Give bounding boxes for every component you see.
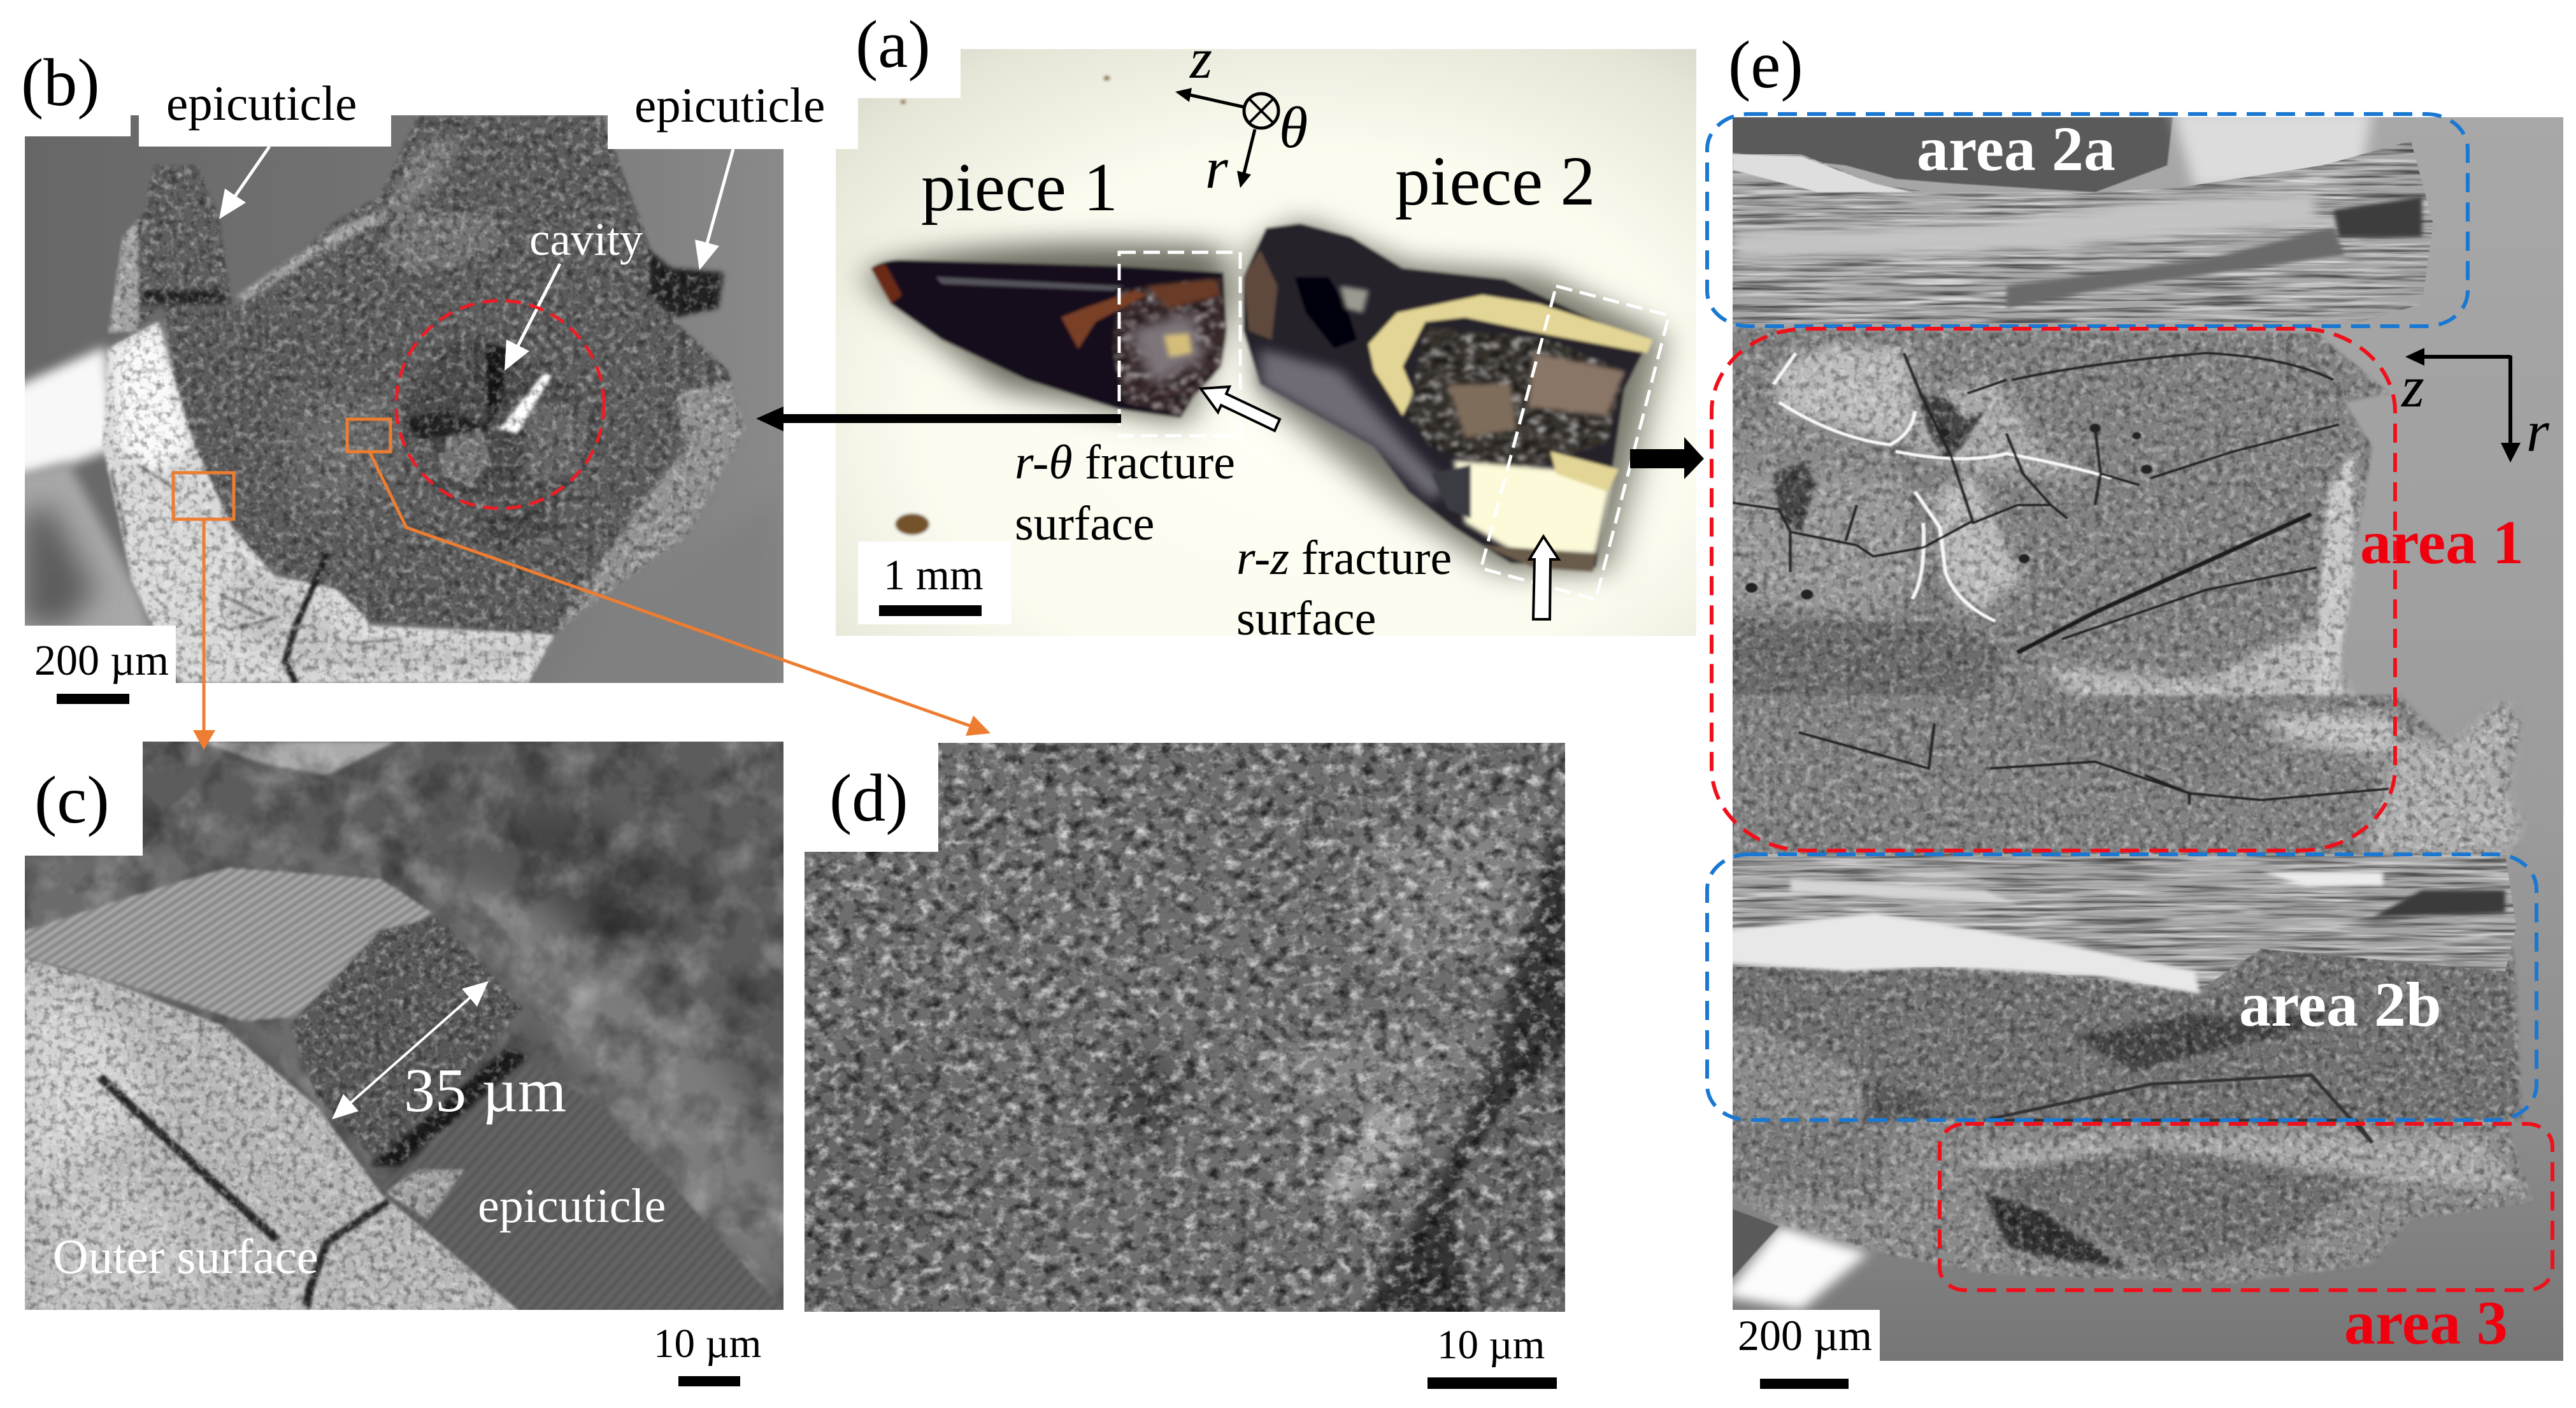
arrow: epicuticle left <box>219 147 269 219</box>
blue dashed area 2b <box>1707 854 2537 1120</box>
label r-z fracture surface: fracture <box>1289 531 1452 585</box>
label area 2a: area 2a <box>1917 113 2115 184</box>
label area 2b: area 2b <box>2239 969 2442 1040</box>
scale bar <box>57 694 129 704</box>
label (c): (c) <box>34 763 110 837</box>
outlined arrow to r-theta surface <box>1201 387 1280 431</box>
axes z and r <box>2400 348 2550 464</box>
scale bar <box>1428 1377 1557 1389</box>
label r-z fracture surface: r-z <box>1236 531 1289 585</box>
label (a): (a) <box>855 7 931 82</box>
label (e): (e) <box>1728 27 1803 102</box>
scale box 1 mm <box>858 542 1012 624</box>
label epicuticle right: epicuticle <box>634 78 825 133</box>
label area 3: area 3 <box>2344 1289 2508 1358</box>
label epicuticle left: epicuticle <box>166 76 357 131</box>
white dashed box on piece 1 <box>1119 252 1240 436</box>
blue dashed area 2a <box>1707 114 2468 326</box>
scale box 1 mm: 1 mm <box>884 550 984 599</box>
white label notches <box>836 49 961 149</box>
label 35 um: 35 µm <box>404 1056 566 1125</box>
axes z and r: z <box>2400 354 2424 419</box>
arrow: cavity <box>504 264 560 371</box>
orange connector to panel c <box>193 519 215 750</box>
axes: z, r, theta: θ <box>1279 95 1308 160</box>
label (b): (b) <box>21 45 100 120</box>
micrograph b <box>25 115 784 683</box>
connector: block arrow from a to e <box>1630 437 1704 479</box>
label r-theta fracture surface: fracture <box>1073 436 1235 489</box>
outlined arrow to r-z surface <box>1529 536 1559 619</box>
axes: z, r, theta: r <box>1205 136 1229 201</box>
axes: z, r, theta <box>1175 27 1308 201</box>
panel d: rough surface SEM <box>790 728 1614 1389</box>
red dashed area 3 <box>1940 1124 2552 1290</box>
label r-theta fracture surface: surface <box>1015 497 1154 550</box>
micrograph c <box>0 728 824 1332</box>
label r-z fracture surface: surface <box>1236 592 1376 645</box>
scale bar <box>1760 1379 1849 1389</box>
label area 1: area 1 <box>2360 508 2524 577</box>
white dashed box on piece 2 <box>1481 286 1669 600</box>
panel e: r-z fracture SEM <box>1707 27 2576 1389</box>
white label notches <box>0 0 828 683</box>
micrograph d <box>790 728 1614 1332</box>
label r-theta fracture surface: r-θ <box>1015 436 1073 489</box>
scale label 10 um: 10 µm <box>1437 1322 1545 1368</box>
scale label 200 um: 200 µm <box>1738 1311 1872 1360</box>
scale bar <box>678 1376 740 1386</box>
red dashed area 1 <box>1712 329 2395 851</box>
axes: z, r, theta: z <box>1189 27 1212 90</box>
panel a: photograph of two pieces <box>822 7 1710 648</box>
panel b: fracture surface SEM <box>24 58 824 704</box>
label outer surface: Outer surface <box>53 1229 318 1284</box>
arrow: epicuticle right <box>695 149 733 270</box>
axes z and r: r <box>2526 399 2550 464</box>
scale label 200 um: 200 µm <box>34 636 169 684</box>
photo a <box>822 40 1710 648</box>
orange zoom box (c) <box>173 473 234 519</box>
white label notch <box>25 742 143 856</box>
white label notch <box>805 743 938 852</box>
thickness double arrow <box>332 981 489 1119</box>
label cavity: cavity <box>529 213 643 265</box>
panel c: epicuticle SEM <box>0 728 824 1386</box>
orange connector to panel d <box>369 452 991 736</box>
label piece 2: piece 2 <box>1395 142 1596 220</box>
label epicuticle: epicuticle <box>478 1179 666 1233</box>
scale label 10 um: 10 µm <box>654 1321 761 1367</box>
white label notch <box>1733 1310 1880 1361</box>
red dashed circle <box>396 301 604 508</box>
micrograph e <box>1707 96 2576 1383</box>
label (d): (d) <box>829 761 908 835</box>
orange zoom box (d) <box>347 419 390 452</box>
label piece 1: piece 1 <box>921 150 1118 226</box>
connector: black arrow from a to b <box>756 406 1121 431</box>
